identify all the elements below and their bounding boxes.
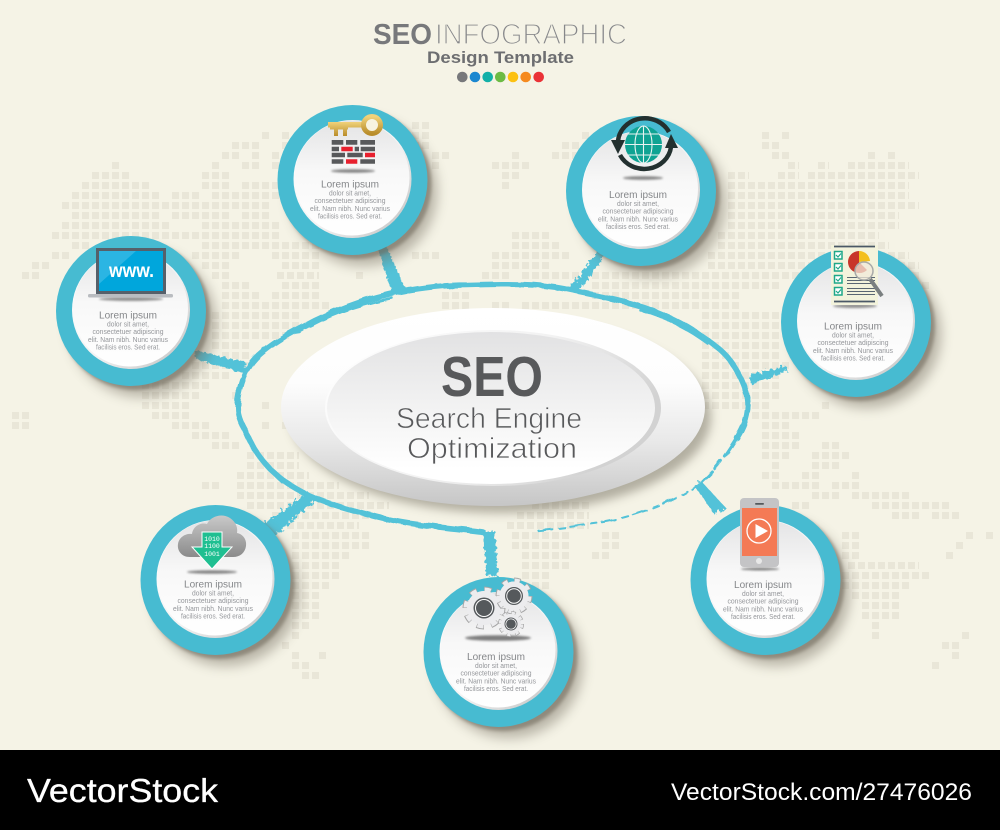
text: lorem ipsum: consectetuer adipiscing <box>92 327 164 336</box>
central ellipse badge <box>281 308 711 513</box>
text: lorem ipsum: Lorem ipsum <box>824 320 882 332</box>
text: lorem ipsum: Lorem ipsum <box>734 579 792 591</box>
text: lorem ipsum: facilisis eros. Sed erat. <box>181 612 245 620</box>
icon: smartphone play <box>740 498 779 570</box>
text: lorem ipsum: Lorem ipsum <box>467 651 525 663</box>
text: lorem ipsum: elit. Nam nibh. Nunc varius <box>723 604 803 614</box>
panel: gears circle <box>424 577 583 738</box>
connector: report circle to ring <box>750 366 787 385</box>
connector: gears circle to ring <box>483 531 498 576</box>
text: lorem ipsum: dolor sit amet, <box>617 199 659 208</box>
world map dot pattern <box>12 126 993 676</box>
text: lorem ipsum: facilisis eros. Sed erat. <box>821 354 885 362</box>
text: lorem ipsum <box>598 189 678 231</box>
central connection ring: brush stroke <box>238 284 748 532</box>
icon: cloud download: 1010 <box>204 536 220 543</box>
title <box>373 19 627 82</box>
text: lorem ipsum <box>173 578 253 620</box>
text: lorem ipsum: dolor sit amet, <box>742 589 784 598</box>
text: lorem ipsum: consectetuer adipiscing <box>314 196 386 205</box>
icon: laptop www: www. <box>108 261 154 282</box>
panel: cloud download circle <box>140 505 300 666</box>
text: lorem ipsum <box>310 178 390 220</box>
text: lorem ipsum: elit. Nam nibh. Nunc varius <box>88 335 168 344</box>
panel: smartphone circle <box>690 498 850 666</box>
panel: laptop circle <box>56 236 216 397</box>
text: lorem ipsum: Lorem ipsum <box>321 178 379 190</box>
connector: cloud circle to ring <box>264 492 317 536</box>
text: lorem ipsum: consectetuer adipiscing <box>460 668 532 678</box>
heading: SEO: SEO <box>441 345 543 409</box>
connector: laptop circle to ring <box>194 350 247 374</box>
icon: laptop www <box>88 248 173 301</box>
text: lorem ipsum: consectetuer adipiscing <box>602 206 674 216</box>
text: Search Engine: Search Engine <box>396 403 582 435</box>
text: lorem ipsum: dolor sit amet, <box>107 320 149 328</box>
connector: phone circle to ring <box>694 482 726 514</box>
icon: key and brick wall <box>328 116 380 173</box>
text: lorem ipsum: Lorem ipsum <box>184 578 242 590</box>
text: lorem ipsum: facilisis eros. Sed erat. <box>318 212 382 220</box>
connector: globe circle to ring <box>569 251 606 291</box>
text: lorem ipsum: dolor sit amet, <box>475 661 517 670</box>
icon: cloud download: 1001 <box>204 551 220 558</box>
text: lorem ipsum: Lorem ipsum <box>99 310 157 322</box>
icon: gears <box>465 582 531 641</box>
text: lorem ipsum <box>723 579 803 621</box>
text: lorem ipsum <box>813 320 893 362</box>
text: lorem ipsum: facilisis eros. Sed erat. <box>96 342 160 352</box>
text: lorem ipsum: facilisis eros. Sed erat. <box>606 222 670 231</box>
icon: globe with arrows <box>611 118 678 180</box>
subtitle: Design Template <box>427 48 574 67</box>
text: lorem ipsum: consectetuer adipiscing <box>728 596 798 606</box>
icon: report and magnifier <box>831 245 882 308</box>
panel: report circle <box>781 245 941 408</box>
text: lorem ipsum: facilisis eros. Sed erat. <box>731 612 795 621</box>
icon: cloud download <box>178 516 246 574</box>
text: lorem ipsum <box>88 310 168 352</box>
text: lorem ipsum: dolor sit amet, <box>832 330 874 340</box>
text: lorem ipsum: elit. Nam nibh. Nunc varius <box>598 214 678 224</box>
connector: key circle to ring <box>370 225 406 293</box>
text: Optimization: Optimization <box>407 433 577 465</box>
text: lorem ipsum: elit. Nam nibh. Nunc varius <box>813 346 893 355</box>
title: SEO <box>373 19 432 51</box>
text: lorem ipsum: elit. Nam nibh. Nunc varius <box>456 676 536 686</box>
colour dots <box>457 72 544 82</box>
text: lorem ipsum <box>456 651 536 693</box>
text: lorem ipsum: elit. Nam nibh. Nunc varius <box>310 204 390 213</box>
footer brand: VectorStock <box>27 772 219 809</box>
text: lorem ipsum: consectetuer adipiscing <box>818 338 888 347</box>
panel: key and wall circle <box>278 105 437 266</box>
panel: globe circle <box>566 116 726 277</box>
text: lorem ipsum: facilisis eros. Sed erat. <box>464 684 528 693</box>
icon: cloud download: 1100 <box>204 543 220 550</box>
text: lorem ipsum: dolor sit amet, <box>192 588 234 598</box>
text: lorem ipsum: dolor sit amet, <box>329 188 371 198</box>
footer bar <box>0 750 1000 830</box>
text: lorem ipsum: elit. Nam nibh. Nunc varius <box>173 604 253 613</box>
text: lorem ipsum: consectetuer adipiscing <box>178 596 248 605</box>
text: lorem ipsum: Lorem ipsum <box>609 189 667 201</box>
title: INFOGRAPHIC <box>435 19 627 51</box>
footer image id: VectorStock.com/27476026 <box>671 779 972 806</box>
